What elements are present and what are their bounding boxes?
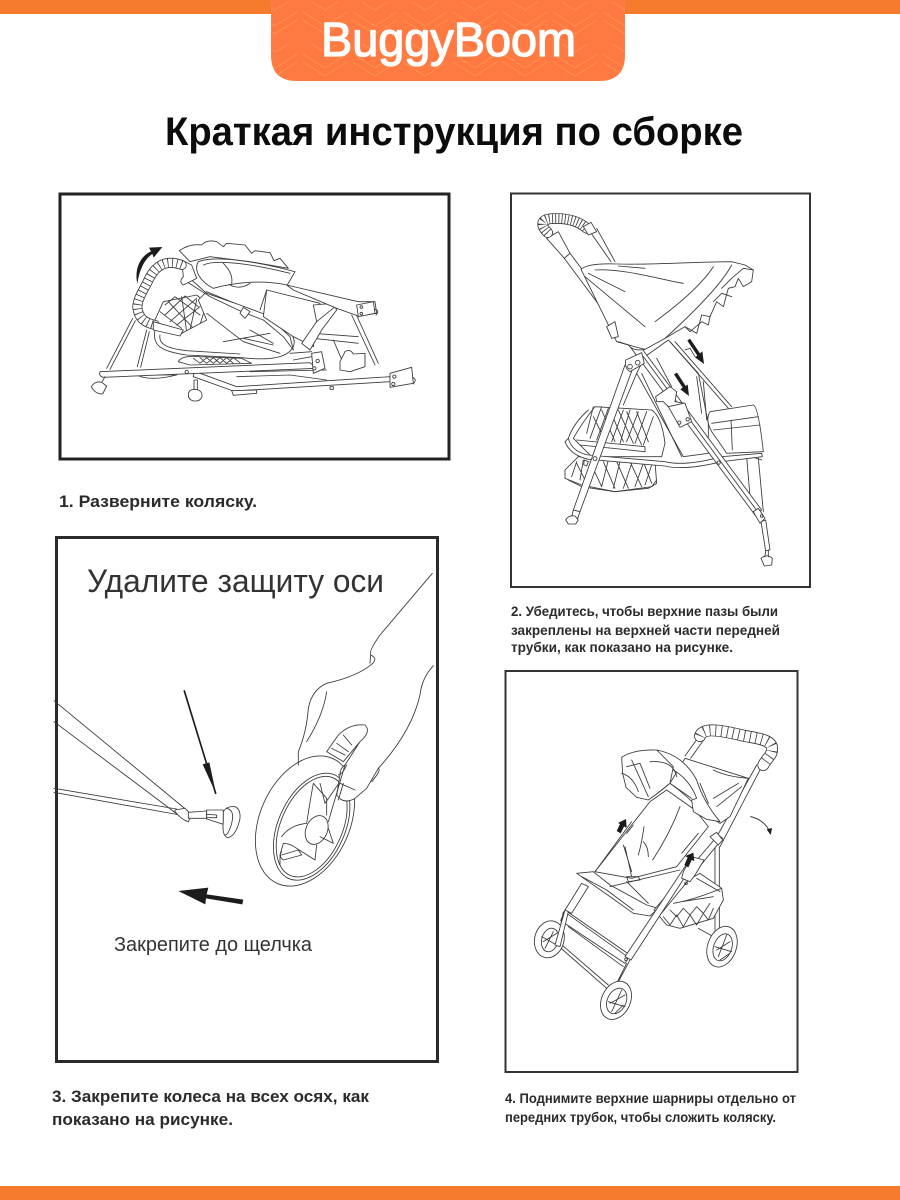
panel: step 2 stroller side view: [511, 194, 810, 587]
caption step 2: 2. Убедитесь, чтобы верхние пазы были: [511, 603, 778, 619]
caption step 4: 4. Поднимите верхние шарниры отдельно от: [505, 1091, 796, 1106]
top orange bar: [0, 0, 900, 14]
arrows: lift hinges: [617, 817, 772, 867]
caption step 4: [505, 1091, 796, 1125]
wheel: [236, 740, 374, 902]
caption step 2: закреплены на верхней части передней: [511, 622, 780, 638]
hand: [298, 573, 433, 822]
axle frame: [54, 701, 240, 838]
panel: step 3 wheel attachment: [54, 538, 437, 1062]
bottom orange bar: [0, 1186, 900, 1200]
panel: step 1 folded stroller: [60, 194, 449, 459]
arrow: down to axle: [184, 691, 216, 794]
note: click until locked: Закрепите до щелчка: [114, 934, 313, 956]
arrow: unfold direction: [136, 247, 162, 284]
canopy: [670, 758, 748, 823]
caption step 4: передних трубок, чтобы сложить коляску.: [505, 1110, 776, 1125]
arrow: left push: [178, 888, 243, 904]
caption step 3: показано на рисунке.: [52, 1110, 233, 1129]
caption step 1: 1. Разверните коляску.: [59, 492, 257, 511]
arrows: push down: [674, 339, 704, 396]
illustration: stroller front view: [530, 730, 772, 1025]
brand logo tab: [271, 0, 625, 81]
illustration: stroller side view: [543, 219, 772, 566]
heading: remove axle protection: Удалите защиту оси: [87, 563, 384, 599]
handle grip: [700, 730, 772, 765]
caption step 2: трубки, как показано на рисунке.: [511, 639, 733, 655]
brand logo tab: BuggyBoom: [321, 14, 576, 67]
wheels: [530, 918, 743, 1025]
title: Краткая инструкция по сборке: [165, 110, 743, 154]
caption step 3: [52, 1087, 369, 1129]
illustration: folded stroller: [91, 241, 415, 401]
panel: step 4 unfolded stroller: [506, 671, 798, 1072]
illustration: hand, wheel and axle: [54, 573, 433, 904]
caption step 3: 3. Закрепите колеса на всех осях, как: [52, 1087, 369, 1106]
caption step 2: [511, 603, 780, 655]
